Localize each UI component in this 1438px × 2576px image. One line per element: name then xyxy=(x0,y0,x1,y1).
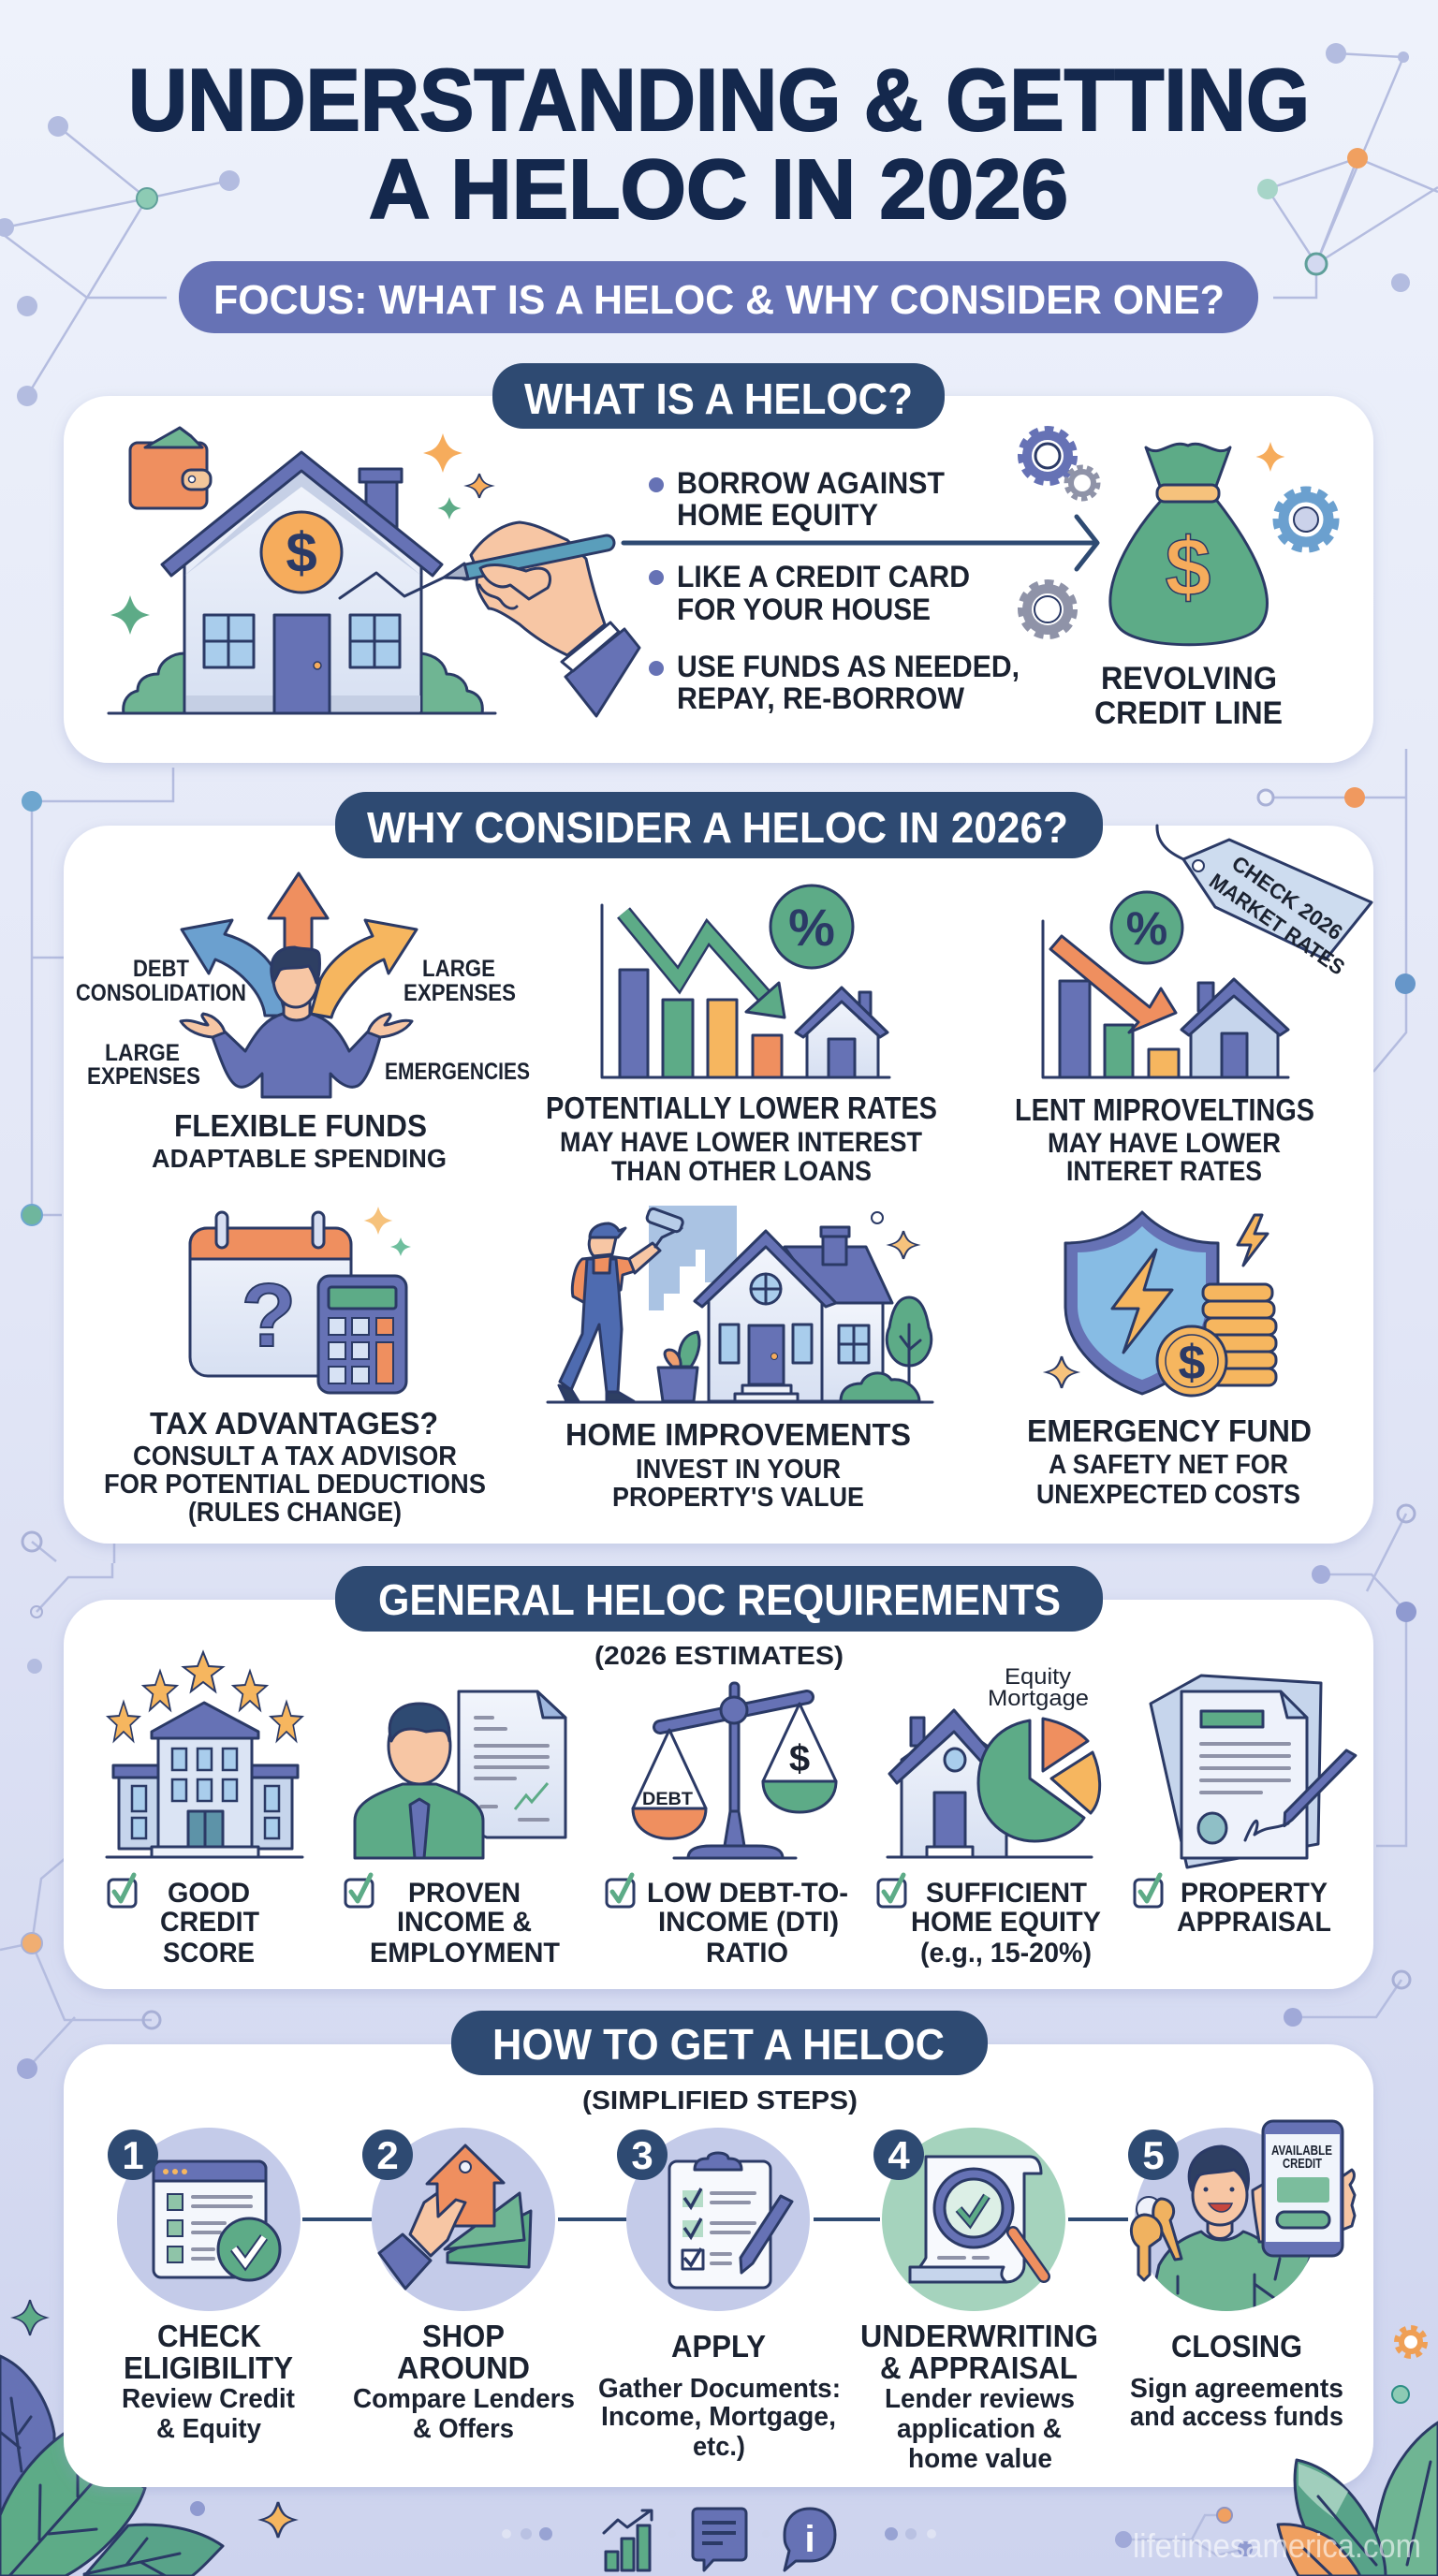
text: tax advantages xyxy=(104,1406,486,1528)
checklist: requirements: (e.g., 15-20%) xyxy=(920,1938,1092,1969)
icon: debt scale: DEBT xyxy=(642,1790,693,1809)
icon: money bag: $ xyxy=(1166,520,1211,613)
labels: uses of funds: EMERGENCIES xyxy=(385,1059,530,1085)
decoration: right leaves xyxy=(1278,2422,1438,2576)
tag: check market rates: CHECK 2026 xyxy=(1227,851,1347,944)
step 1: 1 xyxy=(122,2133,144,2177)
checklist: requirements: APPRAISAL xyxy=(1177,1907,1331,1938)
icon: flexible funds person xyxy=(181,873,417,1097)
text: tax advantages: CONSULT A TAX ADVISOR xyxy=(133,1442,457,1471)
checklist: requirements: PROPERTY xyxy=(1181,1878,1328,1909)
text: interest rates: MAY HAVE LOWER xyxy=(1048,1128,1281,1159)
bullets: HELOC facts xyxy=(649,466,1020,715)
checklist: requirements: INCOME & xyxy=(397,1907,532,1938)
text: shop around: & Offers xyxy=(413,2414,514,2444)
text: home improvements: HOME IMPROVEMENTS xyxy=(565,1417,911,1452)
checklist: requirements: GOOD xyxy=(168,1878,250,1909)
bullets: HELOC facts: REPAY, RE-BORROW xyxy=(677,681,965,715)
icon: growth chart xyxy=(604,2510,652,2570)
step 5: AVAILABLE xyxy=(1271,2143,1332,2159)
text: potentially lower rates xyxy=(546,1090,937,1187)
text: home improvements: INVEST IN YOUR xyxy=(636,1455,841,1485)
chart: interest rates: % xyxy=(1126,902,1167,955)
text: flexible funds xyxy=(152,1108,447,1173)
icon: calendar and calculator: ? xyxy=(242,1266,296,1366)
icon: bank with stars xyxy=(107,1652,302,1857)
checklist: requirements xyxy=(109,1875,1331,1969)
chart: potentially lower rates xyxy=(602,886,889,1077)
title: UNDERSTANDING & GETTING xyxy=(128,51,1310,149)
icon: house with equity pie xyxy=(888,1664,1100,1857)
icon: house with equity pie: Mortgage xyxy=(988,1686,1089,1711)
icon: wallet xyxy=(130,428,211,508)
checklist: requirements: RATIO xyxy=(706,1938,788,1969)
bullets: HELOC facts: FOR YOUR HOUSE xyxy=(677,593,931,626)
step 4 xyxy=(873,2128,1065,2311)
decoration: sparkles and gear xyxy=(13,2300,1424,2538)
icon: money bag xyxy=(1110,444,1267,645)
chart: potentially lower rates: % xyxy=(788,898,835,957)
labels: uses of funds: LARGE xyxy=(422,956,495,982)
subheading: simplified steps: (SIMPLIFIED STEPS) xyxy=(582,2086,858,2115)
text: flexible funds: FLEXIBLE FUNDS xyxy=(174,1108,427,1143)
step 5: 5 xyxy=(1142,2133,1165,2177)
text: potentially lower rates: MAY HAVE LOWER INTEREST xyxy=(560,1127,922,1158)
bullets: HELOC facts: LIKE A CREDIT CARD xyxy=(677,560,970,593)
heading: how to get: HOW TO GET A HELOC xyxy=(492,2020,945,2069)
labels: uses of funds: EXPENSES xyxy=(404,980,516,1006)
label: revolving credit line: REVOLVING xyxy=(1101,661,1277,696)
tag: check market rates xyxy=(1157,826,1372,980)
step 5 xyxy=(1128,2121,1355,2321)
text: closing: CLOSING xyxy=(1171,2329,1302,2364)
text: closing xyxy=(1130,2329,1343,2432)
text: check eligibility xyxy=(122,2319,295,2444)
icon: calendar and calculator xyxy=(190,1207,411,1393)
panel: why consider xyxy=(64,792,1373,1544)
checklist: requirements: PROVEN xyxy=(408,1878,521,1909)
icon: debt scale: $ xyxy=(789,1738,810,1779)
step 2 xyxy=(362,2128,555,2311)
text: shop around: SHOP xyxy=(422,2319,505,2353)
title xyxy=(128,51,1310,237)
text: emergency fund xyxy=(1027,1413,1312,1510)
checklist: requirements: LOW DEBT-TO- xyxy=(647,1878,848,1909)
icon: chat bubble xyxy=(693,2509,746,2570)
text: underwriting and appraisal xyxy=(860,2319,1098,2474)
bullets: HELOC facts: HOME EQUITY xyxy=(677,498,878,532)
bullets: HELOC facts: BORROW AGAINST xyxy=(677,466,945,500)
heading: why consider: WHY CONSIDER A HELOC IN 2026? xyxy=(367,803,1068,852)
text: shop around xyxy=(353,2319,575,2444)
text: tax advantages: FOR POTENTIAL DEDUCTIONS xyxy=(104,1470,486,1500)
panel: requirements xyxy=(64,1566,1373,1989)
tag: check market rates: MARKET RATES xyxy=(1205,869,1349,980)
heading: what is a HELOC xyxy=(492,363,945,429)
icon: home improvements xyxy=(548,1206,932,1402)
step 3 xyxy=(617,2128,810,2311)
text: emergency fund: UNEXPECTED COSTS xyxy=(1036,1480,1300,1510)
text: flexible funds: ADAPTABLE SPENDING xyxy=(152,1144,447,1173)
text: apply: APPLY xyxy=(671,2329,766,2364)
step connectors xyxy=(302,2217,1128,2221)
text: shop around: AROUND xyxy=(397,2350,530,2385)
title: A HELOC IN 2026 xyxy=(369,143,1068,237)
text: check eligibility: & Equity xyxy=(156,2414,261,2444)
labels: uses of funds: CONSOLIDATION xyxy=(76,980,246,1006)
step 1 xyxy=(108,2128,301,2311)
subheading: 2026 estimates: (2026 ESTIMATES) xyxy=(594,1641,844,1670)
text: emergency fund: A SAFETY NET FOR xyxy=(1049,1450,1288,1480)
text: interest rates: LENT MIPROVELTINGS xyxy=(1015,1092,1314,1127)
heading: requirements: GENERAL HELOC REQUIREMENTS xyxy=(378,1575,1061,1624)
bullets: HELOC facts: USE FUNDS AS NEEDED, xyxy=(677,650,1020,683)
text: underwriting and appraisal: UNDERWRITING xyxy=(860,2319,1098,2353)
panel: what is a HELOC xyxy=(64,363,1373,763)
checklist: requirements: HOME EQUITY xyxy=(911,1907,1101,1938)
text: tax advantages: TAX ADVANTAGES? xyxy=(150,1406,438,1441)
text: closing: Sign agreements xyxy=(1130,2374,1343,2404)
icon: shield and coins: $ xyxy=(1179,1336,1206,1390)
icon: house with dollar: $ xyxy=(286,521,317,584)
text: home improvements xyxy=(565,1417,911,1513)
text: tax advantages: (RULES CHANGE) xyxy=(188,1498,402,1528)
text: apply: Gather Documents: xyxy=(598,2374,841,2404)
text: closing: and access funds xyxy=(1130,2402,1343,2432)
chart: interest rates xyxy=(1043,892,1288,1077)
text: underwriting and appraisal: Lender reviews xyxy=(885,2384,1075,2414)
labels: uses of funds xyxy=(76,956,530,1090)
label: revolving credit line: CREDIT LINE xyxy=(1094,695,1283,731)
heading: how to get xyxy=(451,2011,988,2075)
text: potentially lower rates: THAN OTHER LOANS xyxy=(611,1156,872,1187)
icon: house with dollar xyxy=(109,452,495,713)
icon: gears xyxy=(1022,431,1334,635)
text: home improvements: PROPERTY'S VALUE xyxy=(612,1483,864,1513)
text: underwriting and appraisal: & APPRAISAL xyxy=(880,2350,1078,2385)
text: emergency fund: EMERGENCY FUND xyxy=(1027,1413,1312,1448)
text: check eligibility: CHECK xyxy=(157,2319,261,2353)
labels: uses of funds: LARGE xyxy=(105,1040,180,1066)
text: interest rates xyxy=(1015,1092,1314,1187)
focus banner: FOCUS: WHAT IS A HELOC & WHY CONSIDER ONE? xyxy=(213,277,1225,323)
text: apply: Income, Mortgage, xyxy=(601,2402,836,2432)
checklist: requirements: SUFFICIENT xyxy=(926,1878,1087,1909)
labels: uses of funds: EXPENSES xyxy=(87,1063,200,1090)
step 2: 2 xyxy=(376,2133,399,2177)
icon: hand with pen xyxy=(340,522,639,716)
heading: requirements xyxy=(335,1566,1103,1632)
checklist: requirements: CREDIT xyxy=(160,1907,259,1938)
focus banner xyxy=(179,261,1258,333)
footer icons xyxy=(502,2509,936,2570)
icon: person with income document xyxy=(355,1691,565,1858)
text: underwriting and appraisal: home value xyxy=(908,2444,1052,2474)
icon: sparkles xyxy=(110,433,1284,635)
labels: uses of funds: DEBT xyxy=(133,956,189,982)
decoration: left leaves xyxy=(0,2356,223,2576)
heading: what is a HELOC: WHAT IS A HELOC? xyxy=(524,374,913,423)
icon: shield and coins xyxy=(1046,1212,1276,1396)
checklist: requirements: SCORE xyxy=(163,1938,255,1969)
icon: info bubble: i xyxy=(804,2519,815,2560)
arrow: to credit line xyxy=(624,517,1097,569)
icon: house with equity pie: Equity xyxy=(1005,1664,1071,1690)
text: check eligibility: Review Credit xyxy=(122,2384,295,2414)
step 5: CREDIT xyxy=(1283,2156,1322,2172)
icon: appraisal documents xyxy=(1151,1676,1356,1867)
checklist: requirements: INCOME (DTI) xyxy=(658,1907,839,1938)
step 4: 4 xyxy=(888,2133,910,2177)
icon: debt scale xyxy=(633,1683,836,1858)
step 3: 3 xyxy=(631,2133,653,2177)
label: revolving credit line xyxy=(1094,661,1283,731)
panel: how to get xyxy=(64,2011,1373,2487)
text: underwriting and appraisal: application & xyxy=(897,2414,1062,2444)
heading: why consider xyxy=(335,792,1103,858)
checklist: requirements: EMPLOYMENT xyxy=(370,1938,560,1969)
text: apply xyxy=(598,2329,841,2462)
text: check eligibility: ELIGIBILITY xyxy=(124,2350,293,2385)
text: shop around: Compare Lenders xyxy=(353,2384,575,2414)
text: interest rates: INTERET RATES xyxy=(1066,1156,1262,1187)
text: potentially lower rates: POTENTIALLY LOWER RATES xyxy=(546,1090,937,1125)
icon: info bubble xyxy=(785,2509,835,2570)
text: apply: etc.) xyxy=(693,2432,745,2462)
